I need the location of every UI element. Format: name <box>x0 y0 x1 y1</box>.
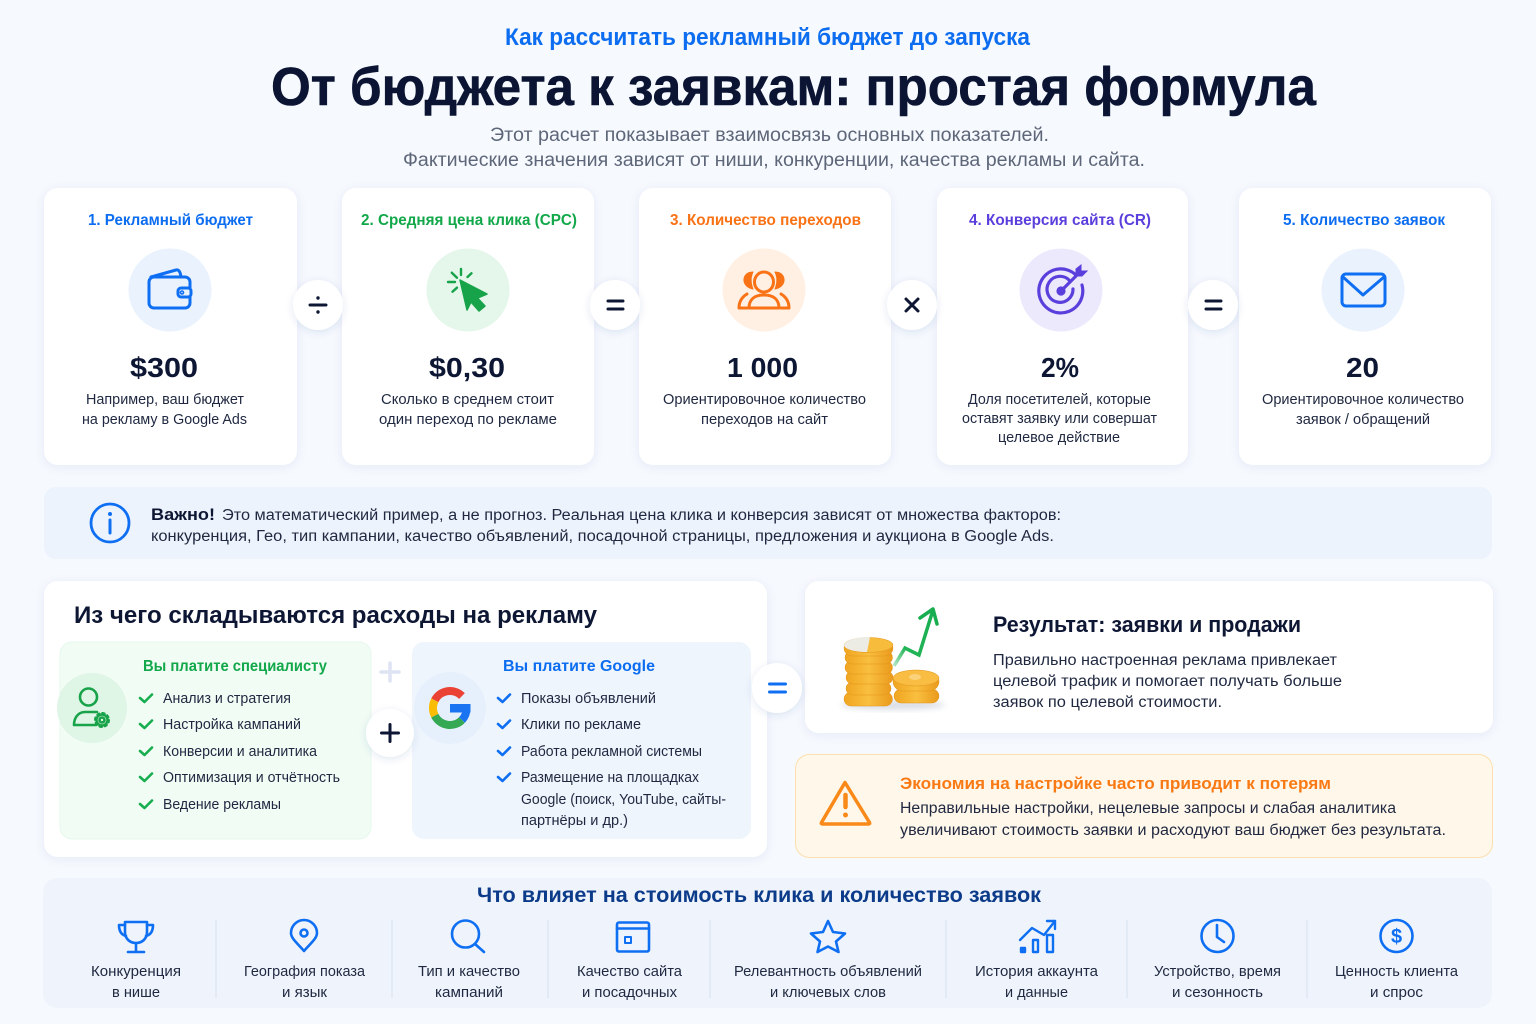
panel: result <box>805 581 1493 733</box>
card 4: conversion <box>937 188 1188 465</box>
intro text: Фактические значения зависят от ниши, конкуренции, качества рекламы и сайта. <box>403 150 1145 171</box>
card 1: budget: на рекламу в Google Ads <box>82 412 247 428</box>
icon: pale plus <box>381 663 399 681</box>
factor: account history: и данные <box>1005 985 1068 1001</box>
operator: plus <box>366 709 414 757</box>
factor: site quality <box>577 922 683 1001</box>
icon: warning triangle <box>821 782 870 824</box>
factor: campaign type <box>418 920 520 1001</box>
panel: google: Вы платите Google <box>503 658 655 675</box>
factor: customer value <box>1335 920 1459 1001</box>
callout: warning: увеличивают стоимость заявки и расходуют ваш бюджет без результата. <box>900 822 1446 839</box>
callout: important note: Это математический пример, а не прогноз. Реальная цена клика и конверсия зависят от множества факторов: <box>222 507 1061 524</box>
icon: google logo <box>433 691 470 725</box>
callout: warning: Неправильные настройки, нецелевые запросы и слабая аналитика <box>900 800 1396 817</box>
card 5: leads: Ориентировочное количество <box>1262 392 1464 408</box>
factor: device and time <box>1154 920 1281 1001</box>
callout: important note <box>44 487 1492 559</box>
panel: specialist <box>57 642 371 839</box>
panel: result: целевой трафик и помогает получать больше <box>993 673 1342 690</box>
icon: people <box>739 272 789 308</box>
panel: google <box>412 642 751 839</box>
card 1: budget: $300 <box>130 352 198 383</box>
panel: ad costs <box>44 581 767 857</box>
icon: wallet <box>149 270 191 308</box>
callout: warning <box>796 754 1492 858</box>
panel: ad costs: Из чего складываются расходы на рекламу <box>74 602 598 629</box>
checklist: google: Google (поиск, YouTube, сайты- <box>521 792 726 808</box>
checklist: specialist: Ведение рекламы <box>163 797 281 813</box>
factor: customer value: $ <box>1391 926 1402 948</box>
intro text <box>403 125 1145 171</box>
card 4: conversion: 4. Конверсия сайта (CR) <box>969 212 1151 229</box>
factor: geography <box>244 920 366 1001</box>
card 5: leads: заявок / обращений <box>1296 412 1430 428</box>
factor: customer value: и спрос <box>1370 985 1423 1001</box>
factor: competition: Конкуренция <box>91 964 181 980</box>
icon: envelope <box>1342 274 1385 306</box>
factor: customer value: Ценность клиента <box>1335 964 1459 980</box>
factor: account history <box>975 921 1099 1001</box>
card 2: CPC: 2. Средняя цена клика (CPC) <box>361 212 577 229</box>
checklist: specialist: Анализ и стратегия <box>163 691 291 707</box>
icon: person with gear <box>74 688 109 727</box>
card 2: CPC <box>342 188 594 465</box>
checklist: specialist <box>140 691 340 813</box>
factor: site quality: Качество сайта <box>577 964 683 980</box>
factor: device and time: и сезонность <box>1172 985 1263 1001</box>
card 4: conversion: Доля посетителей, которые <box>968 392 1151 408</box>
checklist: google: Размещение на площадках <box>521 770 700 786</box>
checklist: google: партнёры и др.) <box>521 813 628 829</box>
factor: device and time: Устройство, время <box>1154 964 1281 980</box>
panel: specialist: Вы платите специалисту <box>143 658 327 675</box>
factor: geography: География показа <box>244 964 366 980</box>
factor: geography: и язык <box>282 985 328 1001</box>
icon: info <box>91 504 129 542</box>
card 1: budget: Например, ваш бюджет <box>86 392 244 408</box>
operator: equals blue <box>752 663 802 713</box>
factor: campaign type: Тип и качество <box>418 964 520 980</box>
checklist: specialist: Оптимизация и отчётность <box>163 770 340 786</box>
icon: target <box>1039 265 1087 313</box>
panel: factors <box>43 878 1492 1008</box>
factor: relevance: Релевантность объявлений <box>734 964 922 980</box>
checklist: specialist: Конверсии и аналитика <box>163 744 318 760</box>
operator: multiply <box>887 280 937 330</box>
panel: result: Правильно настроенная реклама привлекает <box>993 652 1337 669</box>
card 2: CPC: $0,30 <box>429 352 505 383</box>
card 2: CPC: один переход по рекламе <box>379 412 557 428</box>
checklist: google <box>498 691 726 829</box>
card 4: conversion: целевое действие <box>998 430 1120 446</box>
card 1: budget <box>44 188 297 465</box>
factor: account history: История аккаунта <box>975 964 1099 980</box>
card 2: CPC: Сколько в среднем стоит <box>381 392 554 408</box>
panel: result: заявок по целевой стоимости. <box>993 694 1222 711</box>
callout: warning: Экономия на настройке часто приводит к потерям <box>900 775 1331 793</box>
factor: competition <box>91 922 181 1001</box>
card 3: clicks: Ориентировочное количество <box>663 392 866 408</box>
card 1: budget: 1. Рекламный бюджет <box>88 212 253 229</box>
checklist: google: Работа рекламной системы <box>521 744 702 760</box>
factor: competition: в нише <box>112 985 160 1001</box>
checklist: specialist: Настройка кампаний <box>163 717 301 733</box>
callout: important note: конкуренция, Гео, тип кампании, качество объявлений, посадочной страницы, предложения и аукциона в Google Ads. <box>151 528 1054 545</box>
factor: relevance <box>734 921 922 1001</box>
card 4: conversion: оставят заявку или совершат <box>962 411 1157 427</box>
panel: result: Результат: заявки и продажи <box>993 612 1301 637</box>
card 3: clicks: переходов на сайт <box>701 412 828 428</box>
checklist: google: Клики по рекламе <box>521 717 641 733</box>
callout: important note: Важно! <box>151 505 215 524</box>
factor: site quality: и посадочных <box>582 985 678 1001</box>
intro text: Этот расчет показывает взаимосвязь основных показателей. <box>490 125 1049 146</box>
title: От бюджета к заявкам: простая формула <box>271 57 1317 117</box>
factor: relevance: и ключевых слов <box>770 985 886 1001</box>
operator: divide <box>293 280 343 330</box>
card 3: clicks: 3. Количество переходов <box>670 212 861 229</box>
card 3: clicks <box>639 188 891 465</box>
card 5: leads: 5. Количество заявок <box>1283 212 1445 229</box>
factor: campaign type: кампаний <box>435 985 503 1001</box>
eyebrow heading: Как рассчитать рекламный бюджет до запуска <box>505 24 1031 51</box>
card 3: clicks: 1 000 <box>727 352 798 383</box>
panel: factors: Что влияет на стоимость клика и количество заявок <box>477 884 1041 907</box>
illustration: coins and growth arrow <box>841 609 945 710</box>
card 5: leads <box>1239 188 1491 465</box>
card 4: conversion: 2% <box>1041 352 1079 383</box>
checklist: google: Показы объявлений <box>521 691 656 707</box>
operator: equals <box>1188 280 1238 330</box>
icon: cursor click <box>448 269 487 311</box>
card 5: leads: 20 <box>1346 352 1379 383</box>
operator: equals <box>590 280 640 330</box>
